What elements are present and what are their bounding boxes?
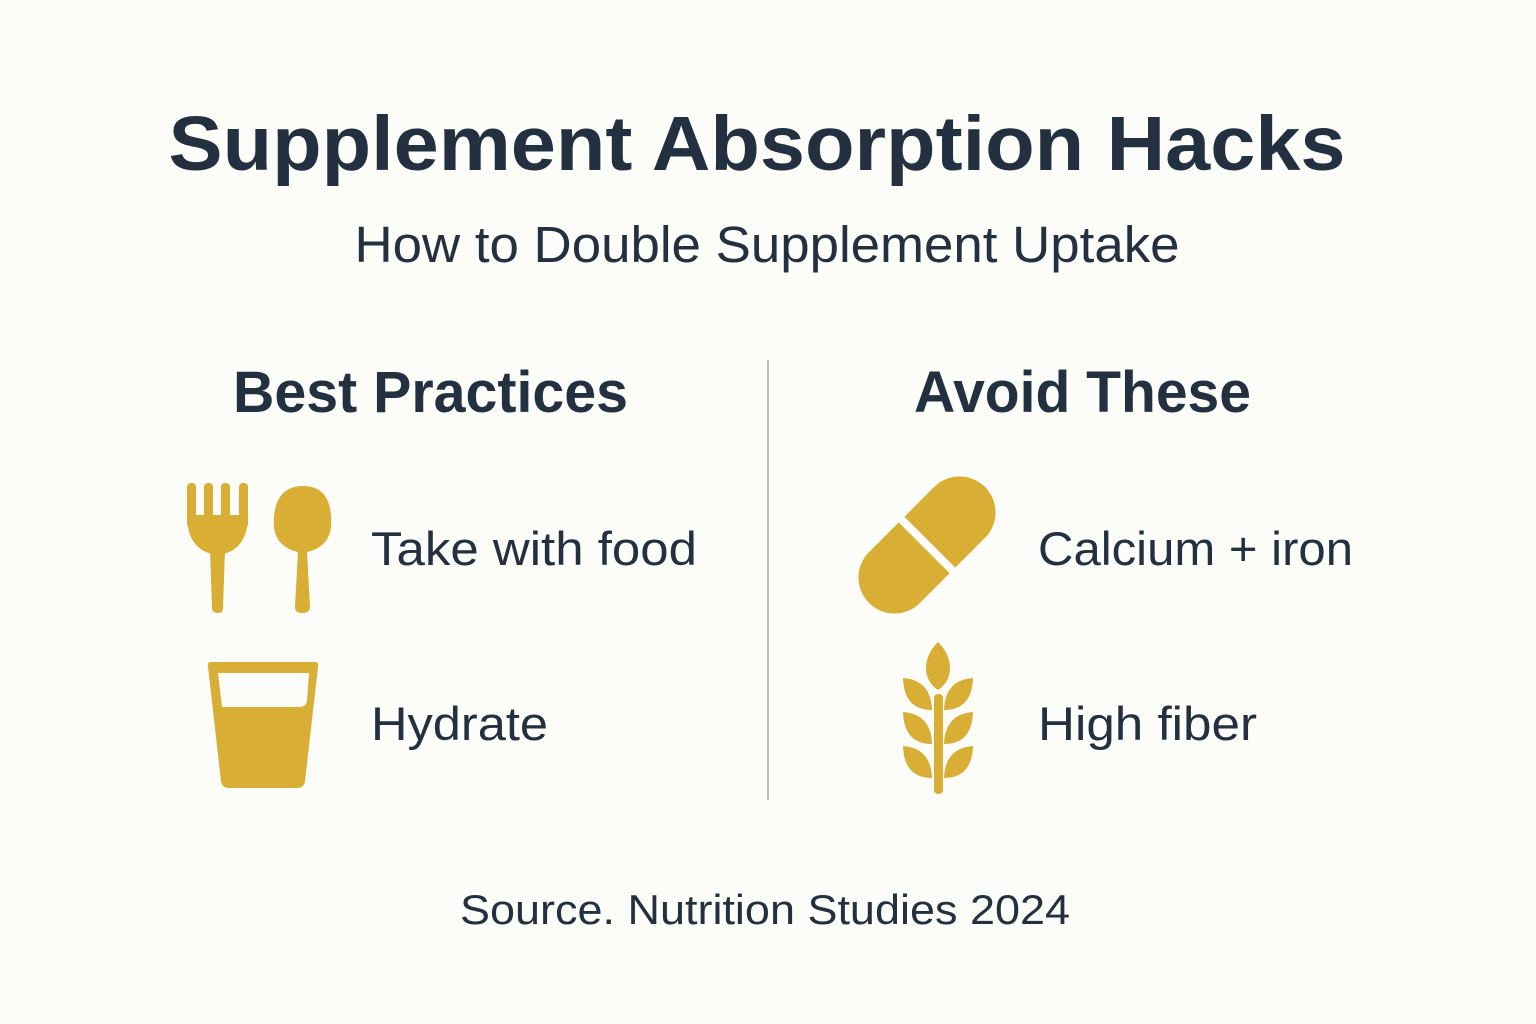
label: calcium + iron: Calcium + iron	[1038, 522, 1353, 575]
label: hydrate: Hydrate	[371, 697, 548, 750]
heading: best practices: Best Practices	[233, 360, 628, 425]
source note: Source. Nutrition Studies 2024	[460, 886, 1070, 933]
label: take with food: Take with food	[371, 522, 697, 575]
divider	[767, 360, 769, 800]
icon: wheat	[903, 642, 973, 794]
icon: capsule pill	[844, 462, 1010, 628]
title: Supplement Absorption Hacks	[168, 101, 1346, 187]
panel: avoid these	[844, 360, 1353, 794]
icon: fork and spoon	[187, 483, 331, 613]
panel: best practices	[187, 360, 697, 788]
label: high fiber: High fiber	[1038, 697, 1257, 750]
icon: glass of water	[208, 662, 318, 788]
subtitle: How to Double Supplement Uptake	[354, 216, 1180, 273]
heading: avoid these: Avoid These	[914, 360, 1251, 425]
